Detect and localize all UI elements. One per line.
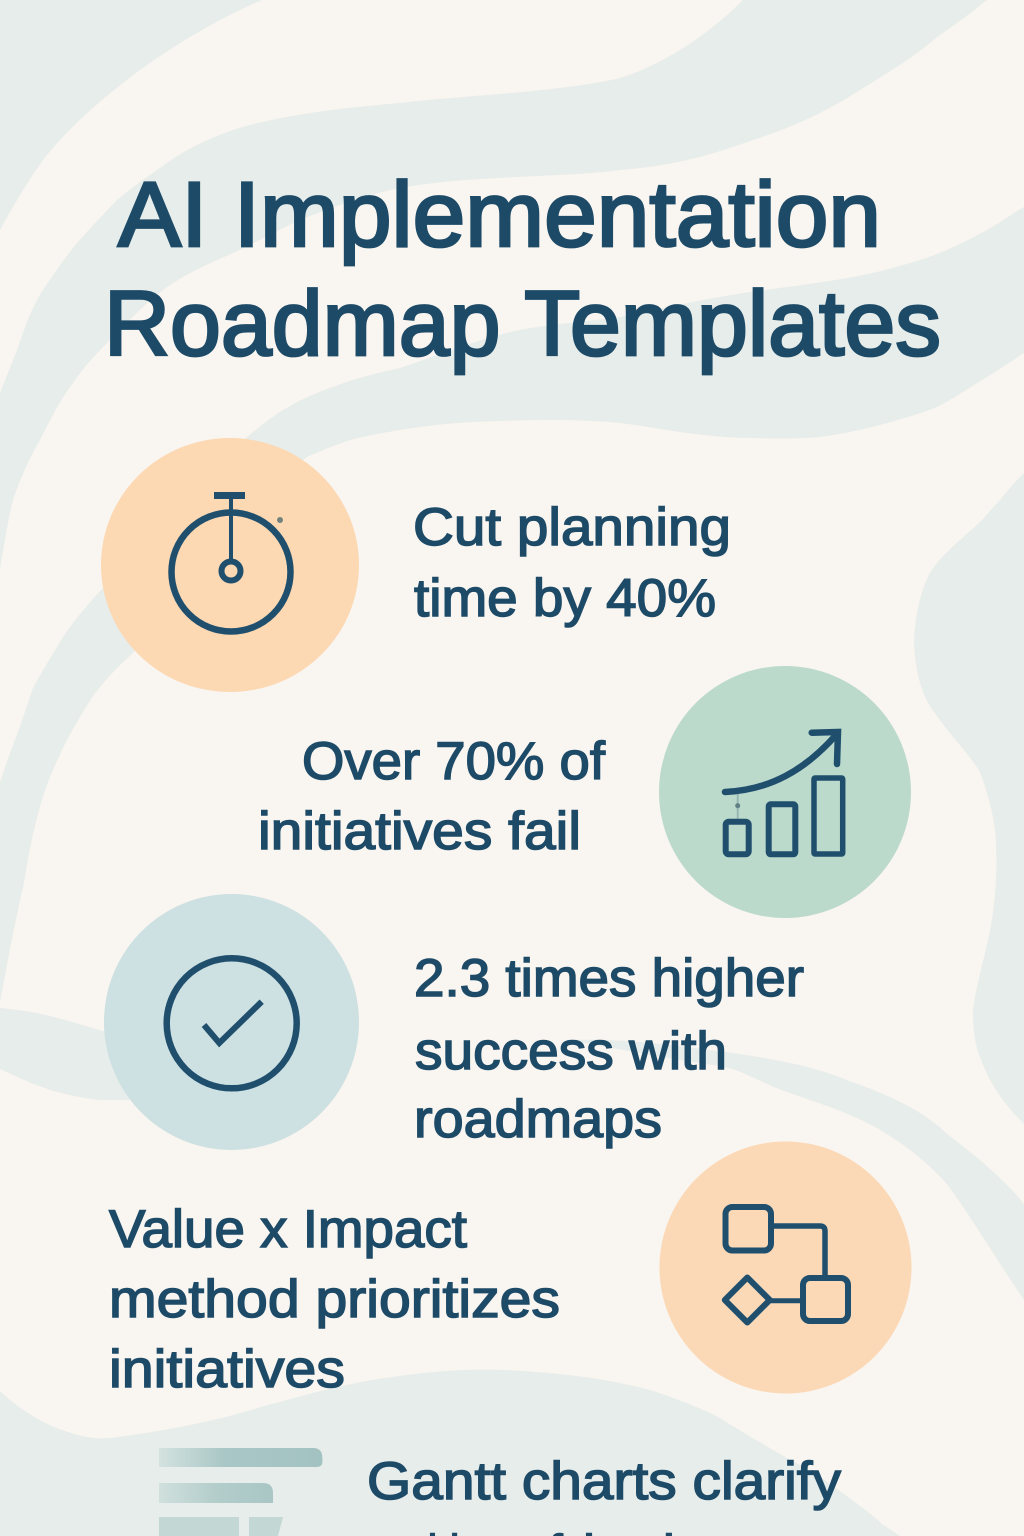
text: gantt charts clarify: Gantt charts clarify [367, 1452, 842, 1511]
panel: gantt charts [159, 1448, 842, 1536]
text: 2.3 times higher [414, 949, 804, 1149]
panel: planning time [101, 438, 731, 692]
panel: initiative failure [258, 666, 911, 918]
text: over 70 percent: initiatives fail [258, 802, 581, 861]
text: gantt charts clarify [367, 1452, 842, 1536]
text: value x impact method: Value x Impact [109, 1200, 467, 1259]
text: value x impact method: method prioritizes [109, 1270, 560, 1329]
text: cut planning time: time by 40% [414, 569, 716, 628]
text: value x impact method [109, 1200, 560, 1399]
text: 2.3 times higher: success with [415, 1022, 727, 1081]
title: Roadmap Templates [104, 273, 941, 375]
icon: gantt bars [159, 1448, 322, 1536]
icon: check mark in blue circle [104, 894, 359, 1150]
title [104, 164, 941, 375]
text: cut planning time: Cut planning [413, 498, 731, 557]
text: cut planning time [413, 498, 731, 628]
panel: value x impact [109, 1142, 912, 1399]
title: AI Implementation [118, 164, 881, 266]
icon: flowchart in orange circle [660, 1142, 912, 1394]
icon: rising bar chart in green circle [659, 666, 911, 918]
icon: stopwatch in orange circle [101, 438, 359, 692]
text: 2.3 times higher: 2.3 times higher [414, 949, 804, 1008]
text: value x impact method: initiatives [109, 1340, 345, 1399]
text: over 70 percent [258, 732, 605, 861]
text: over 70 percent: Over 70% of [302, 732, 605, 791]
panel: success rate [104, 894, 804, 1150]
text: 2.3 times higher: roadmaps [414, 1090, 662, 1149]
